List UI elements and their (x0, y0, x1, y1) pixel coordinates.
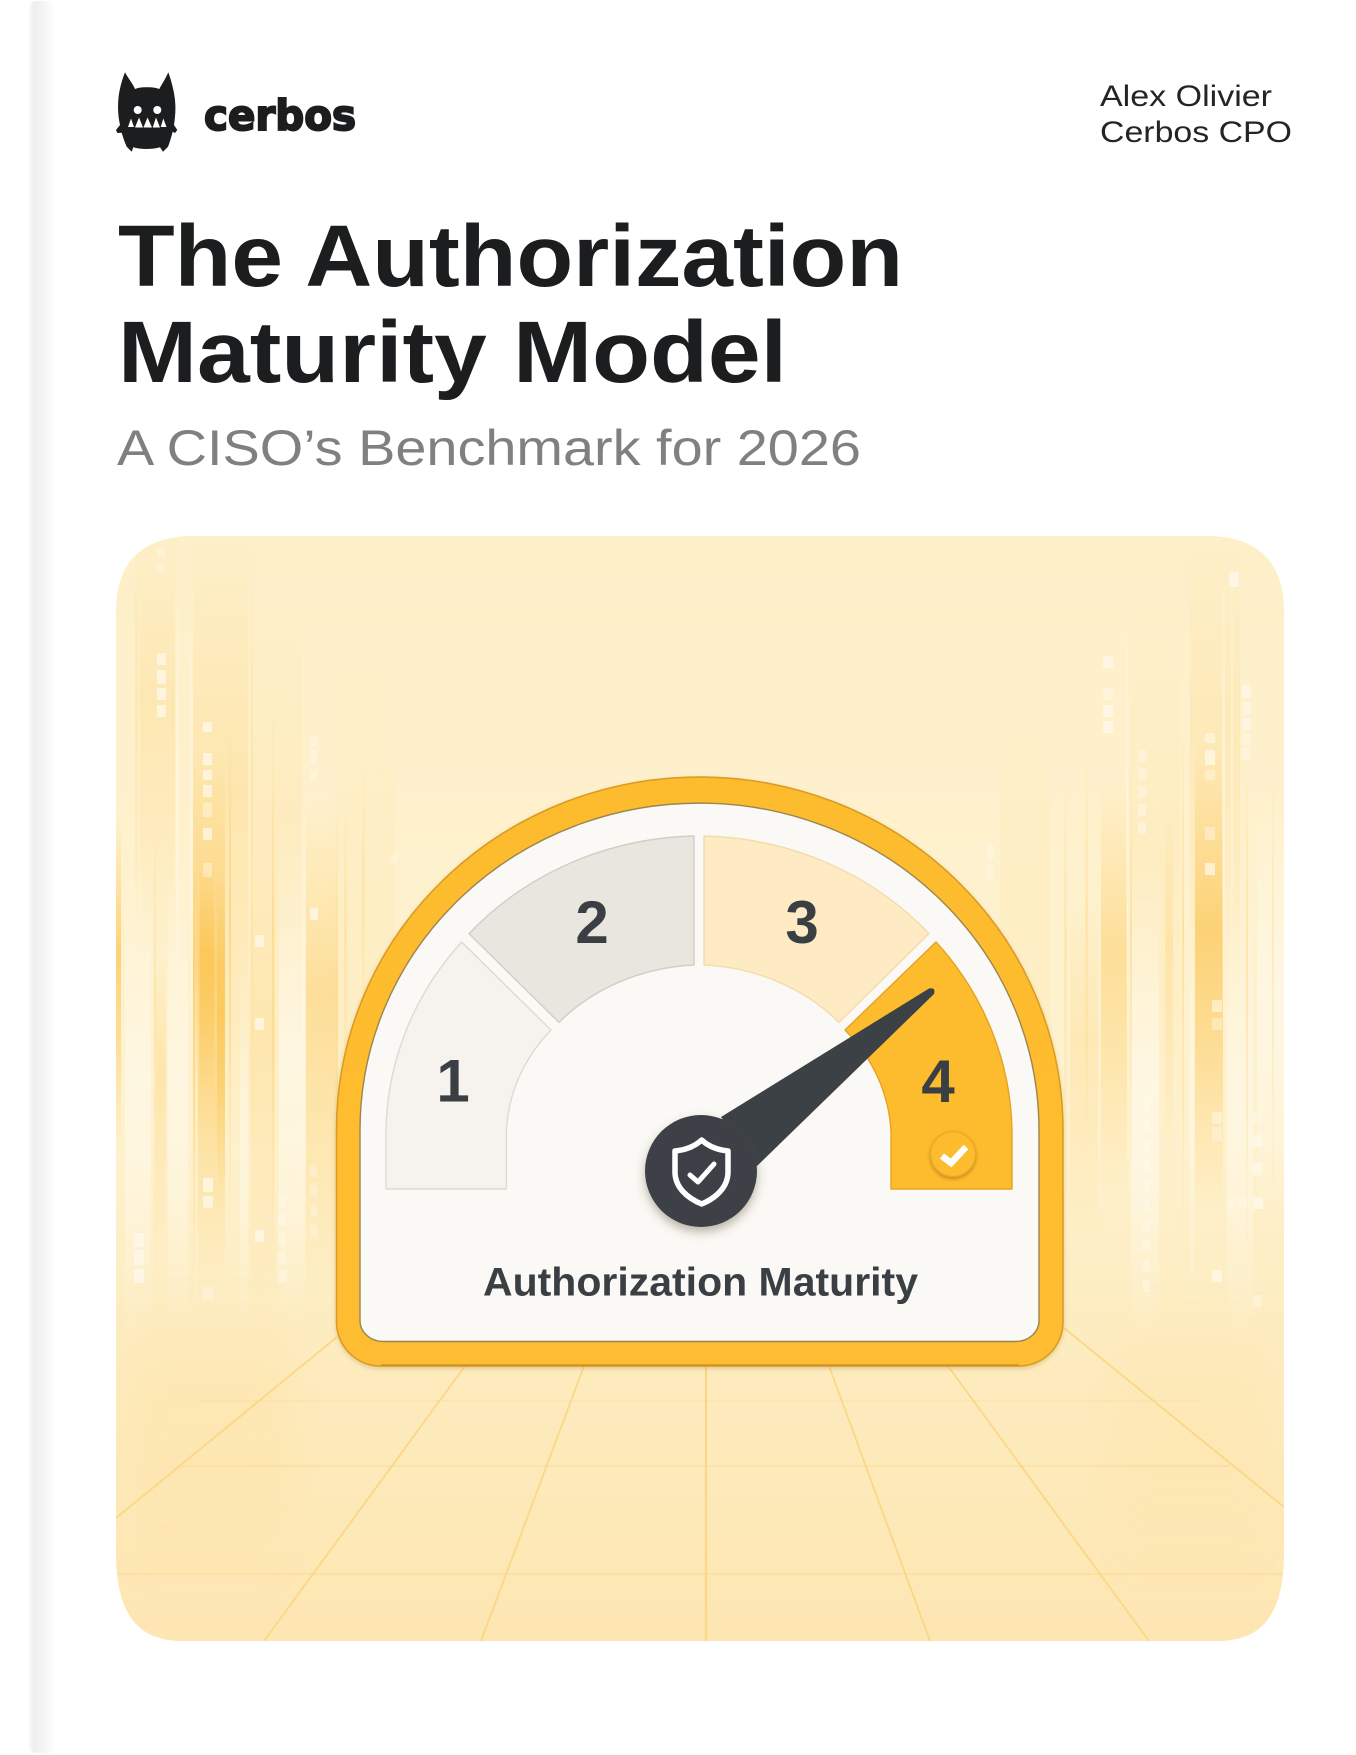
data stream blocks (134, 548, 1263, 1307)
segment 4: 4 (921, 1048, 955, 1115)
icon: check badge (930, 1132, 976, 1176)
segment 4 (845, 942, 1012, 1189)
gauge face (360, 803, 1039, 1342)
title (118, 208, 903, 401)
segment 3: 3 (785, 889, 819, 956)
segment 1: 1 (436, 1048, 470, 1114)
segment 2 (469, 836, 694, 1022)
title: Maturity Model (118, 304, 787, 401)
floor perspective grid (116, 1328, 1284, 1641)
segment 1 (386, 942, 551, 1189)
data stream stripes (116, 593, 1284, 1477)
hub with shield icon (645, 1115, 757, 1227)
author credit (1100, 80, 1292, 149)
gauge label: Authorization Maturity (483, 1260, 919, 1304)
title: The Authorization (118, 208, 903, 305)
icon: shield check (675, 1140, 728, 1204)
segment 3 (704, 836, 929, 1022)
segment 2: 2 (575, 889, 609, 956)
header: Cerbos logo (116, 72, 356, 152)
subtitle: A CISO’s Benchmark for 2026 (117, 420, 861, 476)
gauge (336, 777, 1063, 1366)
icon: Cerbos monster mascot (116, 72, 177, 152)
author credit: Cerbos CPO (1100, 116, 1292, 149)
gauge frame (336, 777, 1063, 1366)
logo wordmark: cerbos (204, 91, 356, 140)
panel: illustration background (116, 536, 1284, 1641)
book spine shadow (28, 1, 56, 1753)
needle (721, 988, 934, 1166)
author credit: Alex Olivier (1100, 80, 1272, 113)
